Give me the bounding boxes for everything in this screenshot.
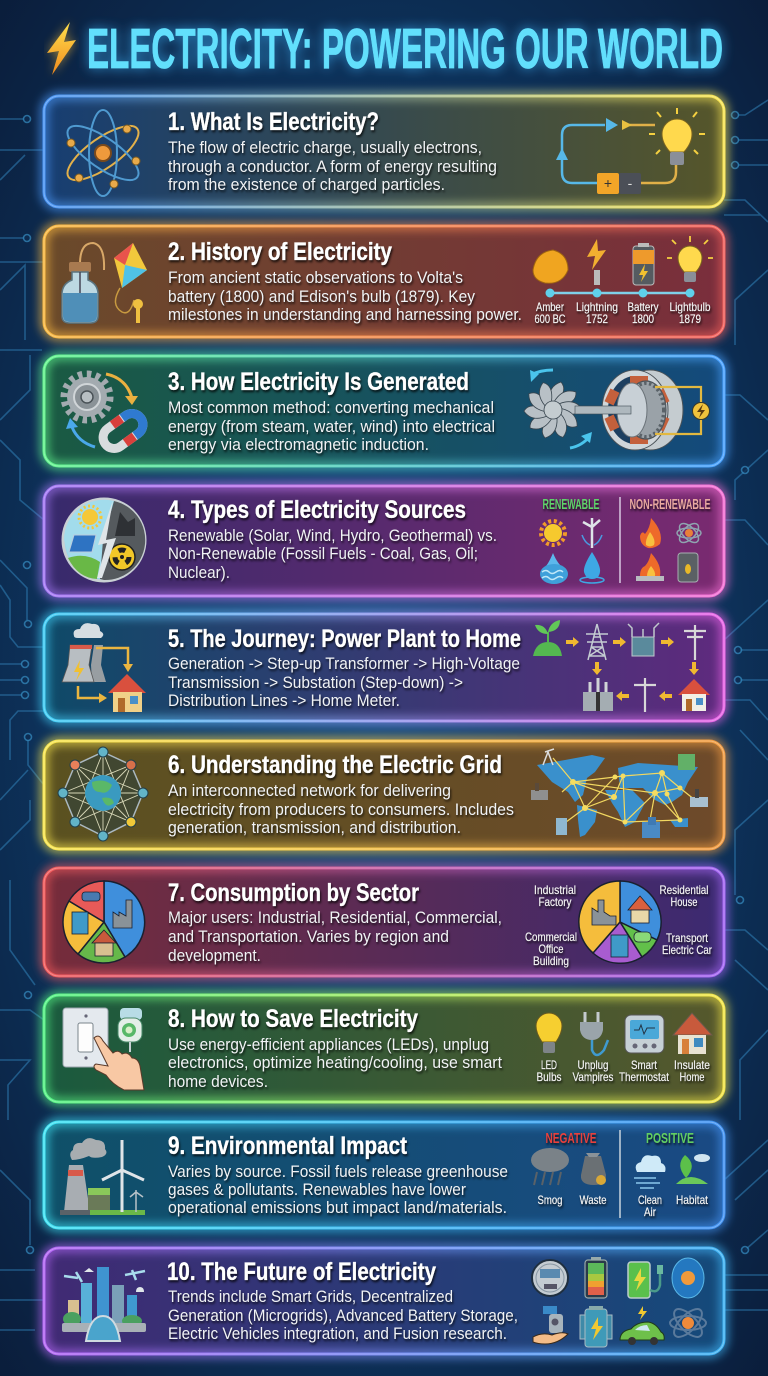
icon: light switch with hand [63,1008,144,1090]
description: battery (1800) and Edison's bulb (1879). Key [168,288,476,306]
heading: 6. Understanding the Electric Grid [168,751,502,779]
description: home devices. [168,1073,268,1091]
timeline labels: Amber [536,300,564,314]
icon: pylon [586,624,608,660]
icon: leyden jar [62,243,104,323]
description: Nuclear). [168,564,230,582]
timeline labels: 1752 [586,312,608,326]
icon labels: Vampires [572,1070,614,1084]
icon labels: Unplug [578,1058,608,1072]
icon: amber [533,250,568,283]
description: Most common method: converting mechanical [168,399,494,417]
pie chart: left [63,881,145,963]
icon: split circle renewable vs non-renewable [63,499,145,581]
pie labels: Industrial [534,883,576,897]
description: From ancient static observations to Volta's [168,269,463,287]
icon labels: Smart [631,1058,658,1072]
description: and Transportation. Varies by region and [168,928,449,946]
description [168,1036,502,1091]
panel 9: environment [44,1122,724,1228]
description: Renewable (Solar, Wind, Hydro, Geothermal) vs. [168,527,497,545]
icon labels [536,1058,710,1084]
icon: title lightning bolt [47,22,76,75]
panel 6: grid [44,741,724,849]
timeline [533,236,713,326]
icon: electric car [620,1306,664,1345]
pie labels [525,883,712,968]
description: operational emissions but impact land/materials. [168,1199,507,1217]
description: Major users: Industrial, Residential, Commercial, [168,909,502,927]
description [168,269,522,324]
icon: house [678,679,710,711]
heading: 2. History of Electricity [168,238,392,266]
timeline labels: 1879 [679,312,701,326]
legend: positive [634,1130,710,1219]
pie labels: Office [538,942,564,956]
description: Trends include Smart Grids, Decentralized [168,1288,453,1306]
legend: negative [531,1130,607,1207]
description [168,655,520,710]
description: development. [168,947,261,965]
legend: renewable sources [540,496,604,584]
icon: hand with device [533,1306,568,1344]
panel 10: future [44,1248,724,1354]
heading: 5. The Journey: Power Plant to Home [168,625,521,653]
legend: positive: POSITIVE [646,1130,694,1147]
timeline labels: Lightning [576,300,618,314]
icon: energy orb [672,1258,704,1298]
icon: circuit with bulb: - [628,175,633,191]
description: Generation (Microgrids), Advanced Battery Storage, [168,1307,518,1325]
arrows [566,637,699,701]
heading: 10. The Future of Electricity [167,1258,436,1286]
icon: transformer [628,623,659,656]
description: Generation -> Step-up Transformer -> High-Voltage [168,655,520,673]
legend: negative: Waste [580,1193,607,1207]
panel 5: journey [44,614,724,721]
icon labels: Bulbs [536,1070,562,1084]
description [168,782,514,837]
icon labels: LED [541,1058,557,1072]
icon: kite and key [114,243,147,323]
flow diagram [533,620,710,712]
description: electronics, optimize heating/cooling, use smart [168,1054,502,1072]
icon: insulated house [673,1013,712,1054]
legend: non-renewable sources [630,496,710,582]
heading: 3. How Electricity Is Generated [168,368,469,396]
icon: thermostat [625,1015,664,1053]
description: gases & pollutants. Renewables have lower [168,1181,466,1199]
pie labels: Building [533,954,569,968]
icon: substation [583,678,613,711]
description: milestones in understanding and harnessing power. [168,306,522,324]
pie labels: Residential [660,883,708,897]
icon: atom [60,110,146,196]
icon: network globe [58,747,148,841]
panel 1: what is electricity [44,96,724,207]
icon: utility pole [684,625,706,660]
timeline labels: Battery [628,300,659,314]
panel 4: sources [44,486,724,596]
icon: circuit with bulb [556,108,705,194]
description: Use energy-efficient appliances (LEDs), unplug [168,1036,489,1054]
description: Non-Renewable (Fossil Fuels - Coal, Gas, Oil; [168,545,478,563]
panel 7: consumption [44,868,724,976]
icon: plant [533,620,562,656]
description [168,1163,508,1217]
panel 3: generation [44,356,724,466]
panel 8: saving [44,995,724,1102]
legend: positive: Air [644,1205,656,1219]
icon: turbine and generator [523,370,710,450]
icon: LED bulb [536,1013,562,1053]
icon labels: Thermostat [619,1070,670,1084]
icon: battery [633,243,654,285]
heading: 8. How to Save Electricity [168,1005,418,1033]
description: Varies by source. Fossil fuels release greenhouse [168,1163,508,1181]
pie labels: House [670,895,698,909]
legend: non-renewable sources: NON-RENEWABLE [630,496,710,513]
description: The flow of electric charge, usually electrons, [168,139,482,157]
description [168,139,497,194]
timeline labels [534,300,711,326]
timeline labels: 1800 [632,312,654,326]
legend: renewable sources: RENEWABLE [542,496,600,513]
icon: chimney and wind turbine [60,1138,145,1215]
heading: 4. Types of Electricity Sources [168,496,466,524]
pie labels: Factory [538,895,572,909]
panel 2: history [44,226,724,337]
description [168,399,495,454]
pie labels: Electric Car [662,943,712,957]
legend: negative: NEGATIVE [546,1130,596,1147]
description: from the existence of charged particles. [168,176,445,194]
pie labels: Commercial [525,930,577,944]
timeline labels: 600 BC [534,312,566,326]
pie labels: Transport [666,931,709,945]
heading: 9. Environmental Impact [168,1132,408,1160]
legend: positive: Clean [638,1193,662,1207]
heading: 1. What Is Electricity? [168,108,379,136]
description: energy (from steam, water, wind) into electrical [168,418,495,436]
icon: charge bar battery [585,1257,607,1298]
heading: 7. Consumption by Sector [168,879,419,907]
legend: negative: Smog [538,1193,562,1207]
icon: storage battery [580,1306,612,1347]
description [168,527,497,582]
description: Distribution Lines -> Home Meter. [168,692,400,710]
icon: bulb [667,236,713,282]
icon: power plant to house [62,623,146,712]
description: energy via electromagnetic induction. [168,436,429,454]
description: through a conductor. A form of energy resulting [168,158,497,176]
description [168,1288,518,1343]
description: generation, transmission, and distribution. [168,819,461,837]
divider [619,497,621,583]
icon: pole [634,678,656,712]
description: An interconnected network for delivering [168,782,451,800]
timeline labels: Lightbulb [670,300,711,314]
icon labels: Insulate [674,1058,710,1072]
icon grid [532,1257,706,1347]
description: Transmission -> Substation (Step-down) -> [168,674,463,692]
icon: atom [670,1305,706,1341]
icon: smart meter [532,1260,568,1296]
description [168,909,502,965]
world map network [531,749,708,838]
icon: plug [580,1012,608,1055]
icon labels: Home [680,1070,705,1084]
legend: positive: Habitat [676,1193,709,1207]
description: Electric Vehicles integration, and Fusion research. [168,1325,507,1343]
description: electricity from producers to consumers. Includes [168,801,514,819]
icon: charger [628,1262,663,1298]
divider [619,1130,621,1218]
pie chart: right [579,881,661,963]
icon: circuit with bulb: + [604,175,612,191]
icon: lightning [587,239,606,285]
icon: future city [62,1267,146,1341]
icon: gear and magnet [64,374,150,456]
